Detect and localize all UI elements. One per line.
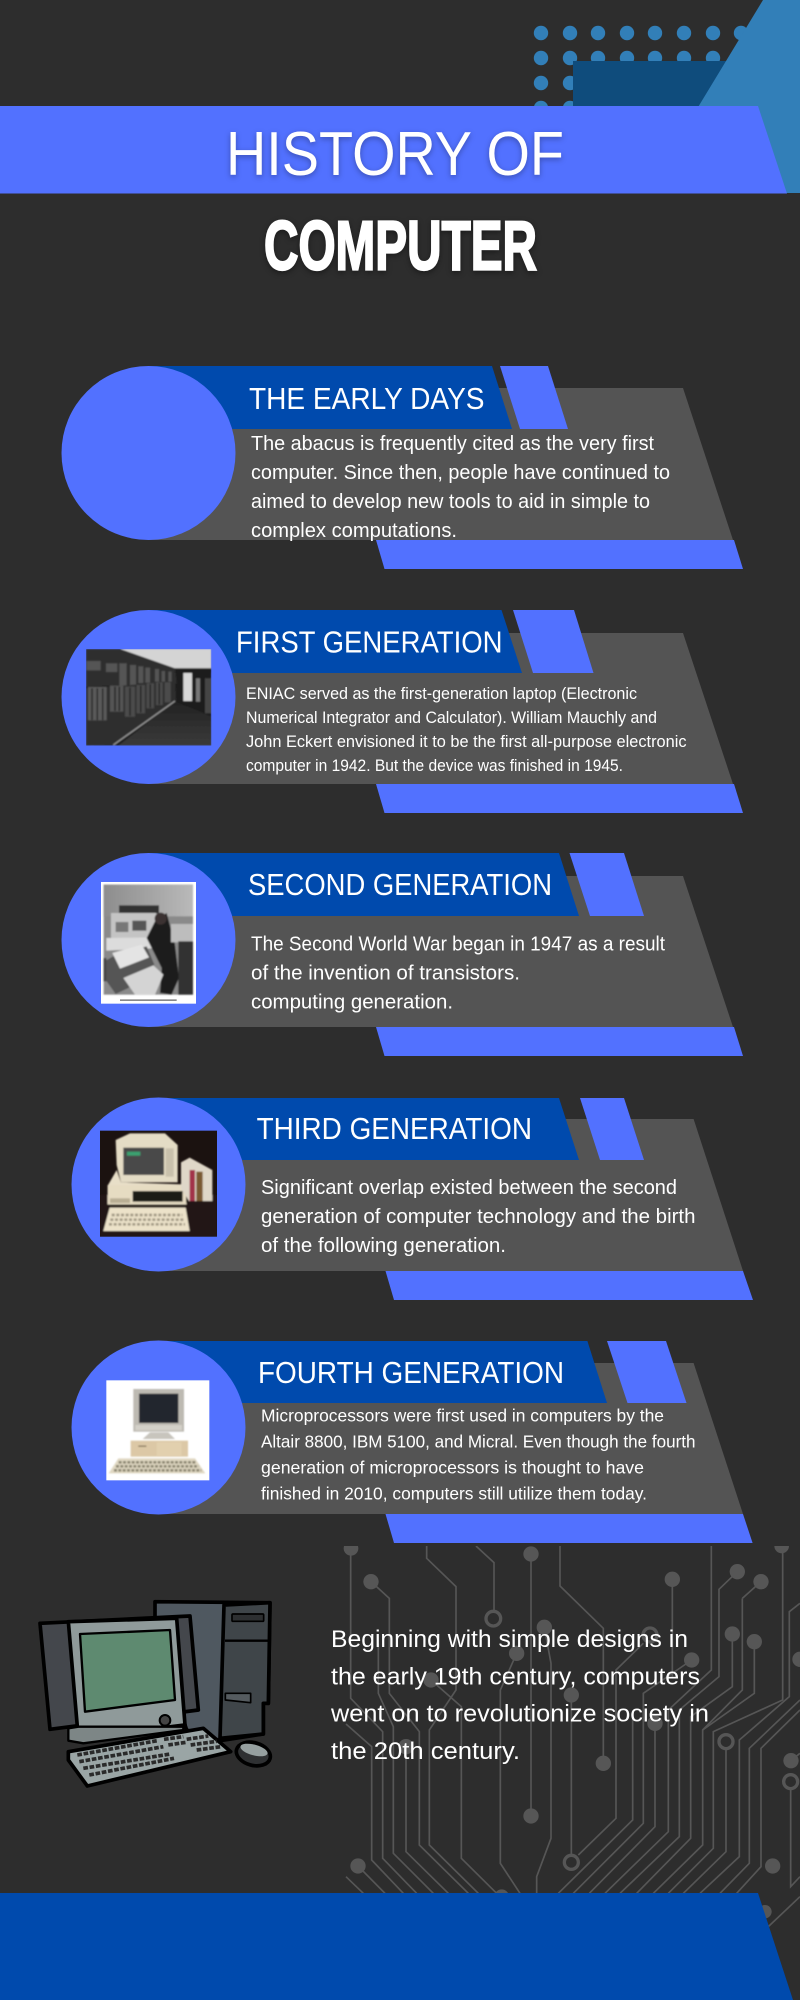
heading: third generation: THIRD GENERATION [257,1111,532,1146]
text: first generation: ENIAC served as the first-generation laptop (Electronic [246,684,637,703]
panel: the early days [62,366,743,569]
text: the early days [251,432,670,542]
title band [0,106,787,194]
image: second generation operator photo [101,882,196,1004]
icon: desktop computer with keyboard and mouse [40,1602,273,1786]
text: first generation [246,684,686,775]
text: third generation: of the following generation. [261,1234,506,1257]
text: second generation [251,933,665,1014]
heading: fourth generation: FOURTH GENERATION [258,1355,564,1390]
circuit board background pattern [344,1539,800,1927]
text: fourth generation: Altair 8800, IBM 5100, and Micral. Even though the fourth [261,1432,696,1452]
text: closing statement: the 20th century. [331,1738,520,1765]
heading: first generation: FIRST GENERATION [236,625,502,660]
footer band [0,1893,793,2000]
title: COMPUTER: COMPUTER [264,206,537,284]
text: first generation: John Eckert envisioned it to be the first all-purpose electronic [246,732,686,751]
text: fourth generation: generation of microprocessors is thought to have [261,1458,644,1478]
header decoration: dot grid, square and triangle [534,0,800,193]
text: the early days: computer. Since then, people have continued to [251,461,670,484]
text: first generation: computer in 1942. But the device was finished in 1945. [246,756,623,775]
text: closing statement: the early 19th century, computers [331,1664,700,1691]
panel: second generation [62,853,743,1056]
text: second generation: computing generation. [251,991,453,1014]
panel: first generation [62,610,743,813]
text: fourth generation [261,1406,696,1504]
image: beige desktop PC photo [106,1380,209,1480]
panel: fourth generation [72,1340,753,1543]
text: the early days: The abacus is frequently cited as the very first [251,432,654,455]
text: closing statement: Beginning with simple designs in [331,1626,688,1653]
heading: second generation: SECOND GENERATION [248,867,552,902]
text: second generation: of the invention of transistors. [251,962,520,985]
text: fourth generation: finished in 2010, computers still utilize them today. [261,1484,647,1504]
panel: third generation [72,1098,753,1300]
text: the early days: aimed to develop new tools to aid in simple to [251,490,650,513]
title: HISTORY OF: HISTORY OF [226,119,564,189]
image: IBM PC photo [100,1131,217,1237]
text: first generation: Numerical Integrator and Calculator). William Mauchly and [246,708,657,727]
heading: the early days: THE EARLY DAYS [249,381,484,416]
text: closing statement: went on to revolutionize society in [330,1701,709,1728]
text: third generation [261,1176,696,1257]
text: third generation: generation of computer technology and the birth [261,1205,696,1228]
text: second generation: The Second World War began in 1947 as a result [251,933,665,956]
text: closing statement [330,1626,709,1765]
text: fourth generation: Microprocessors were first used in computers by the [261,1406,664,1426]
image: ENIAC room photo [86,649,211,746]
text: the early days: complex computations. [251,519,457,542]
text: third generation: Significant overlap existed between the second [261,1176,677,1199]
